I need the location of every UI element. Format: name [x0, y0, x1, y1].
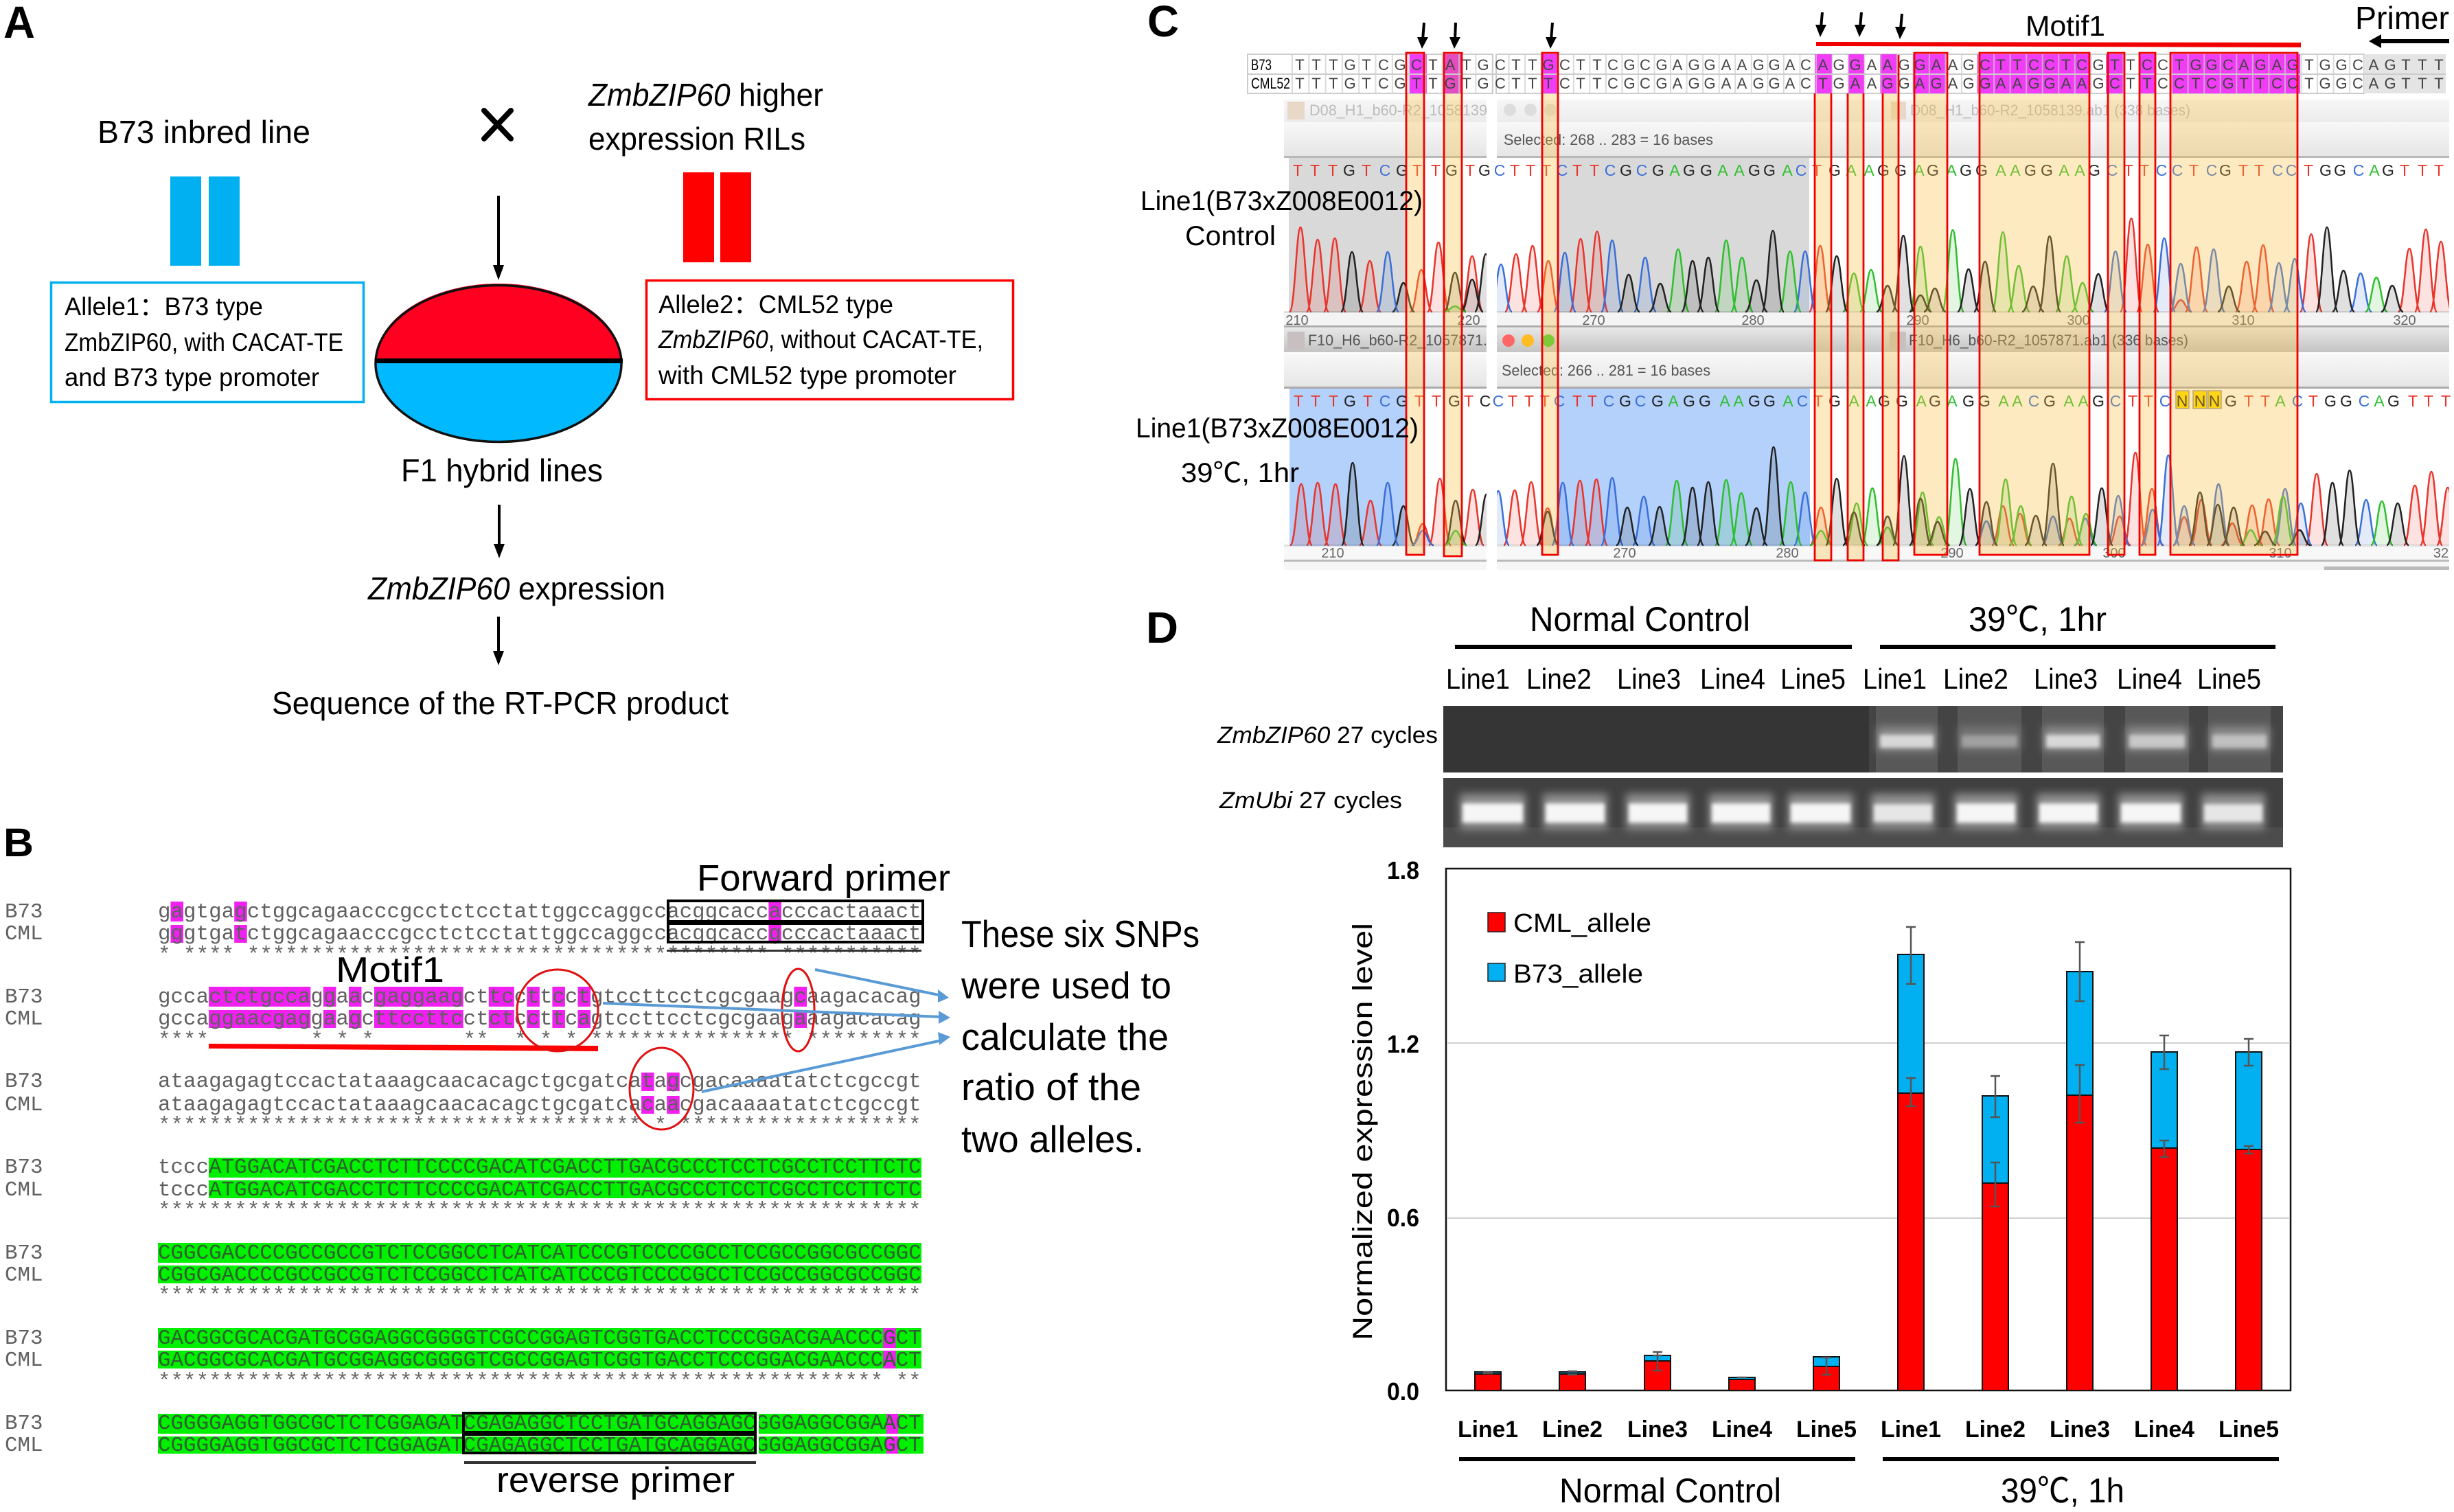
alignment block 6: B73 [5, 1327, 43, 1351]
x axis labels: Line3 [1627, 1417, 1688, 1443]
bars: B73 allele [1475, 954, 2262, 1379]
base calls: control: TTT G T C G TT G TG [1293, 161, 1491, 179]
callout: allele 1 box: ZmbZIP60, with CACAT-TE [65, 328, 343, 356]
arrow: expression to sequencing [493, 617, 504, 665]
plot frame [1446, 869, 2291, 1390]
gel lane labels [1446, 663, 2261, 695]
alignment block 5: CML [5, 1263, 43, 1287]
upper window chrome: D08_H1_b60-R2_1058139.ab1 (338 bases) [1910, 102, 2190, 119]
axis numbers: heat stress: 32 [2433, 546, 2449, 561]
callout: allele 2 box: with CML52 type promoter [658, 361, 956, 389]
axis numbers: heat stress [1321, 546, 2449, 561]
arrow: cross to F1 [493, 196, 504, 280]
axis numbers: control: 280 [1741, 313, 1765, 328]
alignment block 6: ********************************************************* ** [158, 1370, 921, 1394]
label: ZmbZIP60 higher expression RILs: expression RILs [588, 121, 805, 157]
label: ZmbZIP60 expression: ZmbZIP60 expression [367, 571, 665, 606]
icon: RIL red chromosomes [683, 172, 751, 262]
text: six SNPs note: These six SNPs [961, 913, 1200, 955]
y axis ticks: 1.2 [1387, 1030, 1419, 1058]
axis numbers: heat stress: 310 [2269, 546, 2292, 561]
alignment block 2: B73 [5, 985, 43, 1009]
gel lane labels: Line1 [1863, 663, 1927, 695]
base calls: heat stress: CTTTC TT C GC G A GG AA GG AC T G AAGG AG A GG AA CG AAG C TT C NNNG TT A C T GG C AG TTT [1493, 392, 2451, 410]
legend [1488, 909, 1651, 989]
x axis labels: Line2 [1965, 1417, 2026, 1443]
label: heat stress line [1136, 413, 1419, 488]
x axis labels: Line4 [1712, 1417, 1772, 1443]
alignment block 4: CML [5, 1178, 43, 1202]
highlight: NNN ambiguous bases [2176, 391, 2221, 409]
alignment block 1: gggtgatctggcagaacccgcctctcctattggccaggccacggcaccgcccactaaact [158, 922, 921, 946]
panel label D: D [1146, 603, 1178, 652]
highlight: green coding sequence [158, 1158, 924, 1454]
axis numbers: control: 300 [2067, 313, 2090, 328]
alignment block 3: ataagagagtccactataaagcaacacagctgcgatcacaacgacaaaatatctcgccgt [158, 1093, 921, 1117]
alignment block 2: **** * * * ** * * * **************** ********* [158, 1029, 921, 1053]
alignment block 3: CML [5, 1093, 43, 1117]
gel lane labels: Line2 [1943, 663, 2008, 695]
callout: allele 2 box: ZmbZIP60, without CACAT-TE, [658, 325, 983, 354]
lower window chrome: F10_H6_b60-R2_1057871. [1308, 332, 1487, 349]
alignment block 3: B73 [5, 1070, 43, 1094]
alignment block 1: B73 [5, 900, 43, 924]
x axis labels: Line2 [1542, 1417, 1603, 1443]
text: six SNPs note: calculate the [961, 1016, 1169, 1058]
label: control line [1140, 186, 1423, 251]
alignment block 7: CGGGGAGGTGGCGCTCTCGGAGATCGAGAGGCTCCTGATGCAGGAGCGGGAGGCGGAGCT [158, 1434, 921, 1458]
box: reverse primer [463, 1413, 759, 1464]
y axis ticks [1387, 856, 1419, 1406]
alignment block 1 [5, 900, 921, 967]
arrow: F1 to expression [494, 505, 505, 558]
alignment block 4: tccc [158, 1156, 209, 1180]
group label: 39C 1h: 39℃, 1h [2001, 1471, 2124, 1510]
y axis ticks: 0.6 [1387, 1204, 1419, 1232]
label: control line: Line1(B73xZ008E0012) [1140, 186, 1423, 216]
alignment block 5: CGGCGACCCCGCCGCCGTCTCCGGCCTCATCATCCCGTCCCCGCCTCCGCCGGCGCCGGC [158, 1241, 921, 1265]
y axis ticks: 0.0 [1387, 1377, 1419, 1406]
alignment block 4: tccc [158, 1178, 209, 1202]
upper window chrome [1284, 100, 2449, 328]
alignment block 4: B73 [5, 1156, 43, 1180]
alignment block 4: ATGGACATCGACCTCTTCCCCGACATCGACCTTGACGCCCTCCTCGCCTCCTTCTC [209, 1156, 921, 1180]
icon: B73 blue chromosomes [170, 176, 240, 266]
red line: motif1 span [1816, 42, 2301, 47]
axis numbers: control: 320 [2393, 313, 2416, 328]
axis numbers: heat stress: 280 [1776, 546, 1799, 561]
alignment block 3: ************************************** * ******************* [158, 1114, 921, 1138]
axis numbers: heat stress: 300 [2102, 546, 2126, 561]
x axis labels: Line1 [1458, 1417, 1518, 1443]
gel: ZmUbi [1443, 778, 2283, 847]
alignment block 2: gccaggaacgaggaagcttccttcctctccttcagtccttcctcgcgaagaaagacacag [158, 1007, 921, 1031]
panel label B: B [3, 821, 34, 865]
axis numbers: control [1285, 313, 2416, 328]
alignment block 5 [5, 1241, 921, 1308]
label: ZmbZIP60 higher expression RILs [588, 77, 823, 157]
callout: allele 1 box: Allele1：B73 type [65, 293, 263, 321]
alignment table: CML52 [1251, 75, 1290, 92]
chromatogram: heat stress traces [1284, 447, 2454, 547]
callout: allele 2 box: Allele2：CML52 type [658, 290, 893, 319]
highlight: SNP magenta cells [170, 902, 807, 1114]
gel lane labels: Line1 [1446, 663, 1510, 695]
yellow SNP bands [1406, 93, 2297, 560]
circles: SNP highlights [517, 969, 814, 1130]
group bars below chart [1459, 1457, 2279, 1461]
arrows: SNPs to note [603, 970, 950, 1092]
alignment block 3 [5, 1070, 921, 1138]
axis numbers: control: 220 [1457, 313, 1480, 328]
label: Motif1: Motif1 [2026, 10, 2105, 42]
lower window chrome: F10_H6_b60-R2_1057871.ab1 (336 bases) [1909, 332, 2188, 349]
alignment table [1248, 54, 2446, 93]
x axis labels: Line5 [2218, 1417, 2279, 1443]
icon: F1 hybrid ellipse [375, 284, 623, 442]
legend: B73_allele [1513, 960, 1643, 989]
alignment block 7: B73 [5, 1412, 43, 1436]
upper window chrome: D08_H1_b60-R2_1058139 [1309, 102, 1487, 119]
group label: Normal Control: Normal Control [1559, 1471, 1781, 1510]
label: B73 inbred line: B73 inbred line [98, 114, 310, 150]
label: ZmbZIP60 higher expression RILs: ZmbZIP60 higher [588, 77, 823, 113]
label: Motif1: Motif1 [336, 950, 444, 990]
label: Primer: Primer [2355, 0, 2449, 36]
label: reverse primer: reverse primer [496, 1461, 735, 1500]
alignment table: CTTGCTTCGCGAGGAAGGACAGGAAGGAAGCTTCCTCGTTCCTGGCAGAGTGGCAGTTT [1495, 56, 2444, 73]
bar chart: normalized expression [1348, 856, 2291, 1510]
alignment block 3: ataagagagtccactataaagcaacacagctgcgatcatagcgacaaaatatctcgccgt [158, 1070, 921, 1094]
alignment block 2: CML [5, 1007, 43, 1031]
label: heat stress line: 39℃, 1hr [1181, 458, 1299, 488]
axis numbers: heat stress: 210 [1321, 546, 1344, 561]
underline: motif1 [209, 1044, 598, 1051]
x axis labels: Line1 [1881, 1417, 1941, 1443]
alignment block 7 [5, 1412, 921, 1458]
panel B: sequence alignment [3, 821, 1200, 1500]
alignment block 1: CML [5, 922, 43, 946]
text: six SNPs note: were used to [961, 964, 1171, 1007]
label: Forward primer: Forward primer [697, 858, 950, 899]
y axis ticks: 1.8 [1387, 856, 1419, 884]
callout: allele 1 box: and B73 type promoter [65, 363, 319, 391]
alignment table: TTTGTCGCTATG [1295, 56, 1489, 73]
alignment block 2: gccactctgccaggaacgaggaagcttccttcctgtccttcctcgcgaagcaagacacag [158, 985, 921, 1009]
gel heading: Normal Control: Normal Control [1530, 600, 1750, 639]
label: heat stress line: Line1(B73xZ008E0012) [1136, 413, 1419, 444]
axis numbers: control: 210 [1285, 313, 1309, 328]
gel lane labels: Line5 [1780, 663, 1846, 695]
base calls: control: C TTT C TT CGC G AGG AAGG AC T G AAGG AG AGG AAGG AAG C TT CC T CG TT CC T GG C AG TTT [1494, 161, 2444, 179]
alignment block 6 [5, 1327, 921, 1394]
gel lane labels: Line4 [2117, 663, 2182, 695]
alignment block 6: CML [5, 1349, 43, 1373]
lower window chrome [1284, 328, 2449, 570]
alignment block 7: CML [5, 1434, 43, 1458]
arrows: six SNP markers [1417, 12, 1906, 49]
box: forward primer [667, 901, 924, 952]
x axis labels [1458, 1417, 2279, 1443]
gel label: ZmUbi: ZmUbi 27 cycles [1219, 788, 1402, 814]
error bars [1483, 927, 2254, 1377]
group bars above gel [1455, 645, 2275, 649]
base calls: heat stress: TTT G T C G TT GT C [1294, 392, 1491, 410]
callout: allele 1 box [51, 283, 364, 402]
label: F1 hybrid lines: F1 hybrid lines [401, 453, 603, 488]
gel: ZmbZIP60 [1443, 706, 2283, 772]
alignment block 6: GACGGCGCACGATGCGGAGGCGGGGTCGCCGGAGTCGGTGACCTCCCGGACGAACCCGCT [158, 1327, 921, 1351]
alignment block 2 [5, 985, 921, 1053]
gel lane labels: Line2 [1526, 663, 1592, 695]
axis numbers: heat stress: 290 [1940, 546, 1964, 561]
gel label: ZmbZIP60: ZmbZIP60 27 cycles [1217, 722, 1438, 748]
alignment table: TTTGTCGTTGTG [1295, 75, 1489, 92]
alignment block 4: ************************************************************ [158, 1199, 921, 1223]
x axis labels: Line3 [2050, 1417, 2110, 1443]
alignment block 6: GACGGCGCACGATGCGGAGGCGGGGTCGCCGGAGTCGGTGACCTCCCGGACGAACCCACT [158, 1349, 921, 1373]
gel lane labels: Line3 [2034, 663, 2098, 695]
highlight: magenta cells in coding sequence [883, 1328, 898, 1454]
gel heading: 39C 1hr: 39℃, 1hr [1969, 600, 2107, 639]
axis numbers: heat stress: 270 [1613, 546, 1636, 561]
label: control line: Control [1185, 221, 1276, 251]
axis numbers: control: 290 [1906, 313, 1929, 328]
text: six SNPs note: two alleles. [961, 1118, 1144, 1160]
label: sequence of RT-PCR product: Sequence of the RT-PCR product [272, 685, 729, 721]
gel lane labels: Line4 [1700, 663, 1765, 695]
gel lane labels: Line5 [2197, 663, 2261, 695]
alignment table: B73 [1251, 56, 1272, 73]
gel lane labels: Line3 [1617, 663, 1681, 695]
axis numbers: control: 310 [2232, 313, 2255, 328]
alignment table: CTTTCTTCGCGAGGAAGGACTGAAGGAGAGGAAGGAAGCTTCCTCGTTCCTGGCAGTTT [1495, 75, 2444, 92]
text: six SNPs note: ratio of the [961, 1066, 1141, 1108]
bars: CML allele [1475, 1093, 2262, 1390]
arrow: primer direction [2369, 34, 2449, 48]
panel D: expression [1146, 600, 2291, 1510]
x axis labels: Line5 [1796, 1417, 1857, 1443]
text: six SNPs note [961, 913, 1200, 1160]
alignment block 1: gagtgagctggcagaacccgcctctcctattggccaggccacggcaccacccactaaact [158, 900, 921, 924]
alignment block 4: ATGGACATCGACCTCTTCCCCGACATCGACCTTGACGCCCTCCTCGCCTCCTTCTC [209, 1178, 921, 1202]
callout: allele 2 box [647, 280, 1013, 400]
alignment block 4 [5, 1156, 921, 1223]
alignment block 1: * **** ***************************************** *********** [158, 943, 921, 967]
red SNP outlines [1406, 53, 2297, 560]
y axis title: Normalized expression level [1348, 923, 1378, 1340]
panel C: chromatograms [1136, 0, 2454, 570]
panel A: crossing scheme [3, 0, 1013, 721]
lower window chrome: Selected: 266 .. 281 = 16 bases [1502, 362, 1710, 379]
alignment block 7: CGGGGAGGTGGCGCTCTCGGAGATCGAGAGGCTCCTGATGCAGGAGCGGGAGGCGGAACT [158, 1412, 921, 1436]
alignment block 5: CGGCGACCCCGCCGCCGTCTCCGGCCTCATCATCCCGTCCCCGCCTCCGCCGGCGCCGGC [158, 1263, 921, 1287]
x axis labels: Line4 [2134, 1417, 2194, 1443]
legend: CML_allele [1513, 909, 1651, 938]
icon: cross symbol [484, 111, 511, 139]
upper window chrome: Selected: 268 .. 283 = 16 bases [1504, 131, 1713, 148]
alignment block 5: ************************************************************ [158, 1284, 921, 1308]
chromatogram: control traces [1284, 218, 2452, 313]
axis numbers: control: 270 [1582, 313, 1605, 328]
alignment block 5: B73 [5, 1241, 43, 1265]
